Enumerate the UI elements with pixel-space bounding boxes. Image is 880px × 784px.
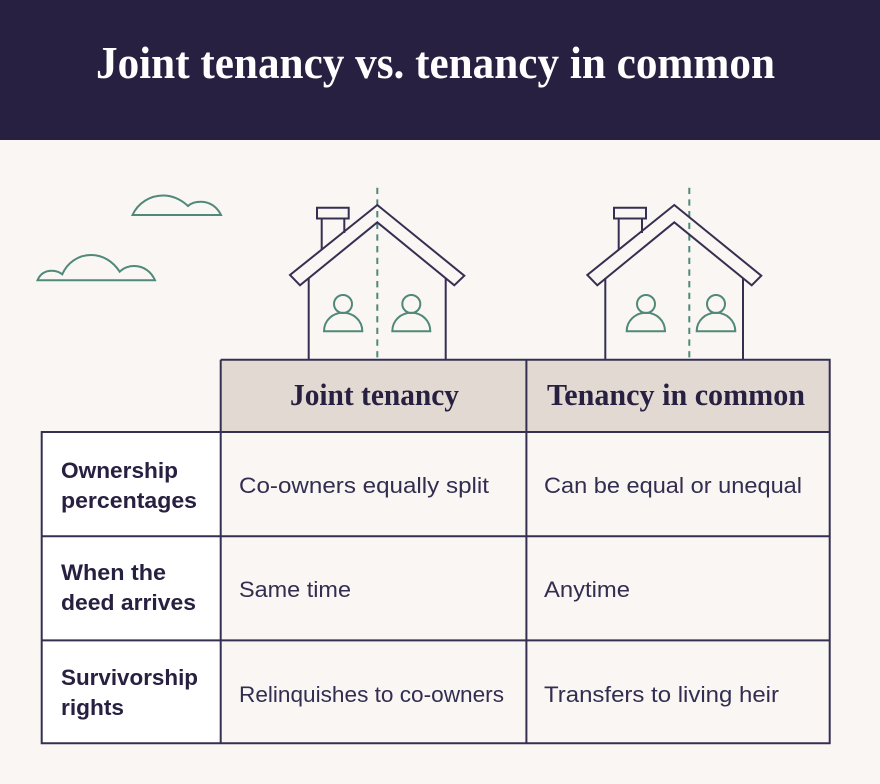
row label: when the deed arrives: When the [61, 560, 166, 585]
dividing dashed line [688, 188, 690, 360]
cell: co-owners equally split: Co-owners equally split [239, 473, 489, 498]
person left [324, 295, 362, 331]
cell: relinquishes to co-owners: Relinquishes to co-owners [239, 682, 504, 707]
house walls [309, 278, 446, 360]
icon: small cloud [132, 196, 221, 215]
column heading: joint tenancy: Joint tenancy [290, 377, 459, 412]
row label: survivorship rights: rights [61, 695, 124, 720]
chimney [317, 208, 349, 250]
cell: transfers to living heir: Transfers to living heir [544, 682, 779, 707]
cell: anytime: Anytime [544, 577, 630, 602]
person right [392, 295, 430, 331]
roof [587, 205, 761, 285]
column heading: tenancy in common: Tenancy in common [547, 377, 805, 412]
title banner [0, 0, 880, 140]
row label: when the deed arrives: deed arrives [61, 590, 196, 615]
chimney [614, 208, 646, 250]
cell: same time: Same time [239, 577, 351, 602]
row label: ownership percentages: percentages [61, 488, 197, 513]
row label background [42, 432, 221, 743]
row label: ownership percentages: Ownership [61, 458, 178, 483]
dividing dashed line [376, 188, 378, 360]
icon: tenancy in common house [587, 188, 761, 360]
table header background [221, 360, 830, 432]
table grid [42, 360, 830, 743]
title: Joint tenancy vs. tenancy in common [96, 38, 775, 88]
row label: survivorship rights: Survivorship [61, 665, 198, 690]
icon: joint tenancy house [290, 188, 464, 360]
person right [697, 295, 735, 331]
icon: large cloud [38, 255, 155, 280]
person left [627, 295, 665, 331]
comparison table [42, 360, 830, 743]
house walls [605, 278, 743, 360]
roof [290, 205, 464, 285]
cell: can be equal or unequal: Can be equal or unequal [544, 473, 802, 498]
